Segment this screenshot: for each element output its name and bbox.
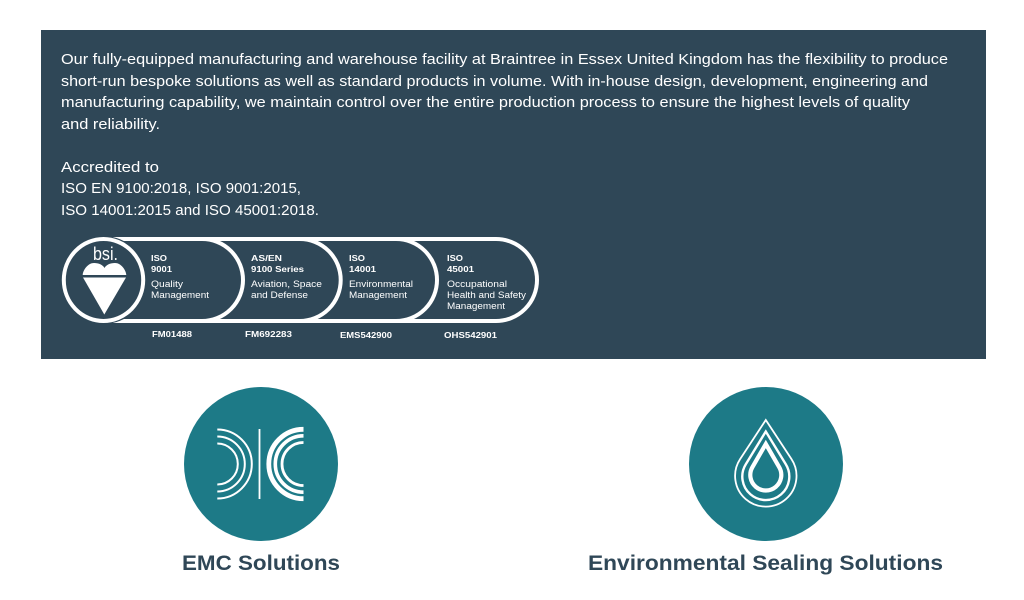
badge: ISO 9001 bbox=[151, 253, 210, 339]
icon: bsi heart logo bbox=[60, 236, 148, 324]
capsule outlines bbox=[104, 239, 537, 321]
text block: facility description: manufacturing capability, we maintain control over the entire production process to ensure the highest levels of quality bbox=[61, 95, 911, 111]
badge: ISO 9001: 9001 bbox=[151, 264, 172, 274]
heading: EMC Solutions: EMC Solutions bbox=[182, 551, 340, 575]
badge: AS/EN 9100: and Defense bbox=[251, 290, 308, 300]
badge: ISO 14001: 14001 bbox=[349, 264, 376, 274]
badge: AS/EN 9100: FM692283 bbox=[245, 329, 292, 339]
badge: ISO 45001: ISO bbox=[447, 253, 463, 263]
icon: water drop circle bbox=[689, 387, 843, 541]
text block: facility description: Our fully-equipped manufacturing and warehouse facility at Braintree in Essex United Kingdom has the flexibility to produce bbox=[61, 52, 948, 68]
text block: facility description bbox=[61, 52, 948, 133]
badge: AS/EN 9100: 9100 Series bbox=[251, 264, 304, 274]
badge: ISO 45001: OHS542901 bbox=[444, 330, 497, 340]
panel: accreditation bbox=[41, 30, 986, 359]
badge: AS/EN 9100: AS/EN bbox=[251, 253, 282, 263]
heading: Environmental Sealing Solutions: Environmental Sealing Solutions bbox=[588, 551, 943, 575]
badge: ISO 14001: Environmental bbox=[349, 279, 413, 289]
text block: facility description: and reliability. bbox=[61, 117, 160, 133]
text block: accreditation list: ISO EN 9100:2018, ISO 9001:2015, bbox=[61, 181, 301, 197]
badge: ISO 14001: ISO bbox=[349, 253, 365, 263]
badge: ISO 45001: Health and Safety bbox=[447, 290, 527, 300]
icon: bsi heart logo: bsi. bbox=[93, 243, 118, 264]
text block: accreditation list bbox=[61, 160, 319, 219]
badge: ISO 9001: FM01488 bbox=[152, 329, 192, 339]
icon: EMC circle bbox=[184, 387, 338, 541]
badge: ISO 9001: Management bbox=[151, 290, 210, 300]
badge row: BSI certifications bbox=[60, 236, 537, 340]
badge: ISO 45001: Occupational bbox=[447, 279, 507, 289]
badge: ISO 45001 bbox=[444, 253, 527, 340]
badge: ISO 14001: EMS542900 bbox=[340, 330, 392, 340]
badge: ISO 14001 bbox=[340, 253, 413, 340]
badge: ISO 45001: 45001 bbox=[447, 264, 474, 274]
text block: facility description: short-run bespoke solutions as well as standard products in volume. With in-house design, development, engineering and bbox=[61, 74, 928, 90]
badge: ISO 14001: Management bbox=[349, 290, 408, 300]
badge: ISO 45001: Management bbox=[447, 301, 506, 311]
badge: AS/EN 9100 bbox=[245, 253, 322, 339]
badge: AS/EN 9100: Aviation, Space bbox=[251, 279, 322, 289]
text block: accreditation list: Accredited to bbox=[61, 160, 159, 176]
badge: ISO 9001: Quality bbox=[151, 279, 184, 289]
text block: accreditation list: ISO 14001:2015 and ISO 45001:2018. bbox=[61, 203, 319, 219]
badge: ISO 9001: ISO bbox=[151, 253, 167, 263]
